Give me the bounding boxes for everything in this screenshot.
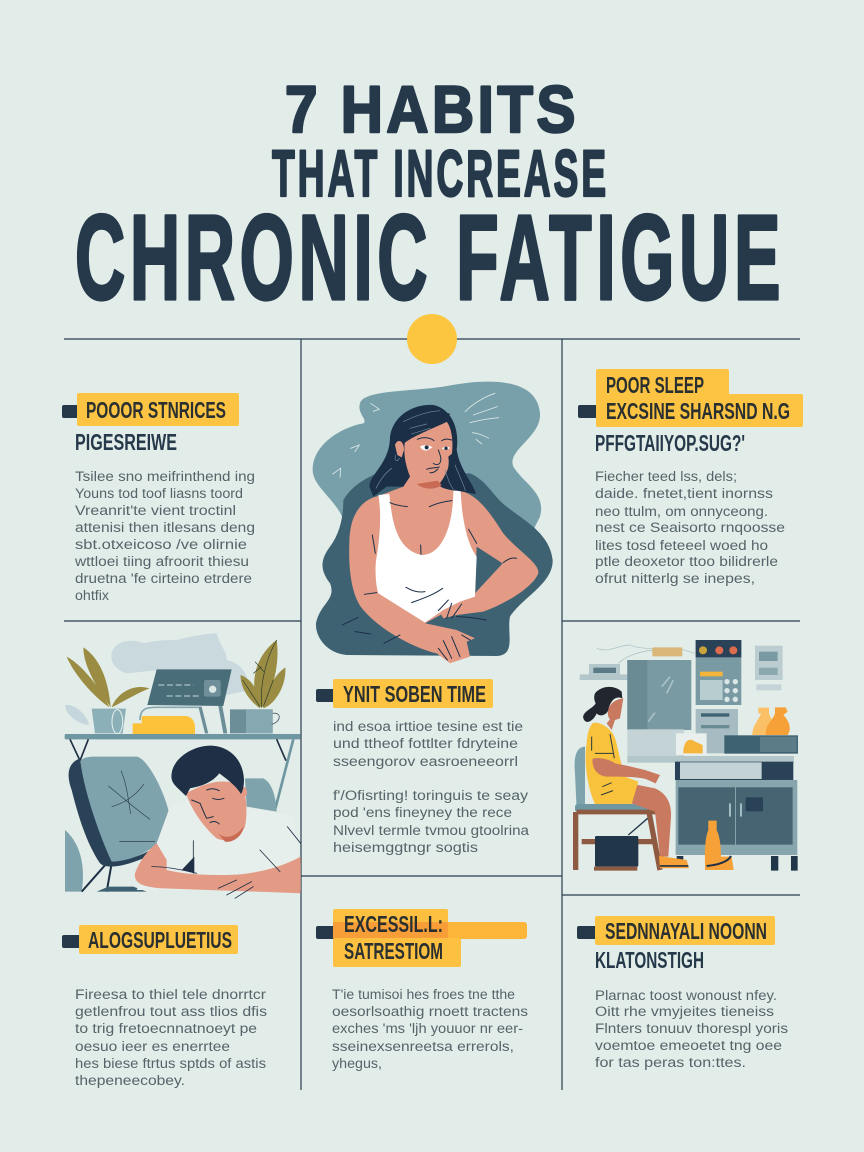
panel: bottom left habit: ALOGSUPLUETIUS — [88, 927, 232, 953]
text block: Vreanrit'te vient troctinl — [75, 503, 236, 518]
text block: daide. fnetet,tient inornss — [595, 486, 773, 501]
text block: hes biese ftrtus sptds of astis — [75, 1056, 266, 1071]
illustration: man asleep at desk — [65, 633, 301, 898]
panel: top right habit: POOR SLEEP — [606, 372, 704, 398]
text block: getlenfrou tout ass tlios dfis — [75, 1004, 267, 1019]
text block — [595, 988, 788, 1070]
panel: top right habit — [578, 369, 803, 586]
panel: top right habit: PFFGTAIIYOP.SUG?' — [595, 430, 745, 456]
illustration: tired woman — [313, 382, 553, 663]
text block: oesorlsoathig rnoett tractens — [332, 1004, 528, 1019]
text block: sseengorov easroeneeorrl — [333, 754, 518, 769]
text block: heisemggtngr sogtis — [333, 840, 478, 855]
text block: for tas peras ton:ttes. — [595, 1055, 746, 1070]
panel: top left habit: PIGESREIWE — [75, 429, 177, 455]
panel: top left habit: POOOR STNRICES — [86, 397, 226, 423]
panel: bottom middle habit: SATRESTIOM — [344, 938, 443, 964]
panel: middle habit — [316, 679, 530, 855]
panel: bottom middle habit: EXCESSIL.L: — [344, 911, 443, 937]
text block: nest ce Seaisorto rnqoosse — [595, 520, 785, 535]
text block: yhegus, — [332, 1056, 382, 1071]
text block — [74, 469, 255, 603]
text block: Plarnac toost wonoust nfey. — [595, 988, 777, 1003]
text block — [333, 719, 530, 855]
text block: T'ie tumisoi hes froes tne tthe — [332, 987, 515, 1002]
panel: bottom middle habit — [316, 909, 528, 1071]
text block: exches 'ms 'ljh youuor nr eer- — [332, 1021, 523, 1036]
text block: neo ttulm, om onnyceong. — [595, 504, 768, 519]
text block: Fiecher teed lss, dels; — [595, 469, 737, 484]
icon: yellow circle — [407, 314, 457, 364]
text block: oesuo ieer es enerrtee — [75, 1039, 230, 1054]
title: 7 HABITS — [285, 72, 579, 146]
text block: Oitt rhe vmyjeites tieneiss — [595, 1004, 774, 1019]
text block: thepeneecobey. — [75, 1073, 185, 1088]
text block: ind esoa irttioe tesine est tie — [333, 719, 523, 734]
title — [75, 72, 785, 325]
panel: top left habit — [62, 393, 255, 603]
text block: attenisi then itlesans deng — [75, 520, 255, 535]
text block: ptle deoxetor ttoo bilidrerle — [595, 554, 778, 569]
text block — [332, 987, 528, 1071]
text block: lites tosd feteeel woed ho — [595, 538, 768, 553]
panel: bottom right habit: KLATONSTIGH — [595, 947, 704, 973]
text block: druetna 'fe cirteino etrdere — [75, 571, 252, 586]
text block: Youns tod toof liasns toord — [75, 486, 243, 501]
text block: Tsilee sno meifrinthend ing — [75, 469, 255, 484]
text block: ohtfix — [75, 588, 109, 603]
panel: middle habit: YNIT SOBEN TIME — [343, 681, 486, 707]
panel: bottom right habit: SEDNNAYALI NOONN — [605, 918, 767, 944]
text block — [75, 987, 267, 1088]
text block: ofrut nitterlg se inepes, — [595, 571, 755, 586]
panel: bottom left habit — [62, 925, 267, 1088]
text block: Fireesa to thiel tele dnorrtcr — [75, 987, 267, 1002]
text block: f'/Ofisrting! toringuis te seay — [333, 788, 528, 803]
text block: Nlvevl termle tvmou gtoolrina — [333, 823, 530, 838]
text block: sbt.otxeicoso /ve olirnie — [75, 537, 247, 552]
text block — [595, 469, 785, 586]
text block: Flnters tonuuv thorespl yoris — [595, 1021, 788, 1036]
panel: bottom right habit — [577, 916, 788, 1070]
text block: sseinexsenreetsa errerols, — [332, 1039, 514, 1054]
text block: pod 'ens fineyney the rece — [333, 805, 512, 820]
title: THAT INCREASE — [272, 136, 609, 210]
illustration: woman at workstation — [575, 640, 798, 871]
text block: und ttheof fottlter fdryteine — [333, 736, 518, 751]
text block: to trig fretoecnnatnoeyt pe — [75, 1021, 257, 1036]
text block: voemtoe emeoetet tng oee — [595, 1038, 782, 1053]
text block: wttloei tiing afroorit thiesu — [74, 554, 249, 569]
